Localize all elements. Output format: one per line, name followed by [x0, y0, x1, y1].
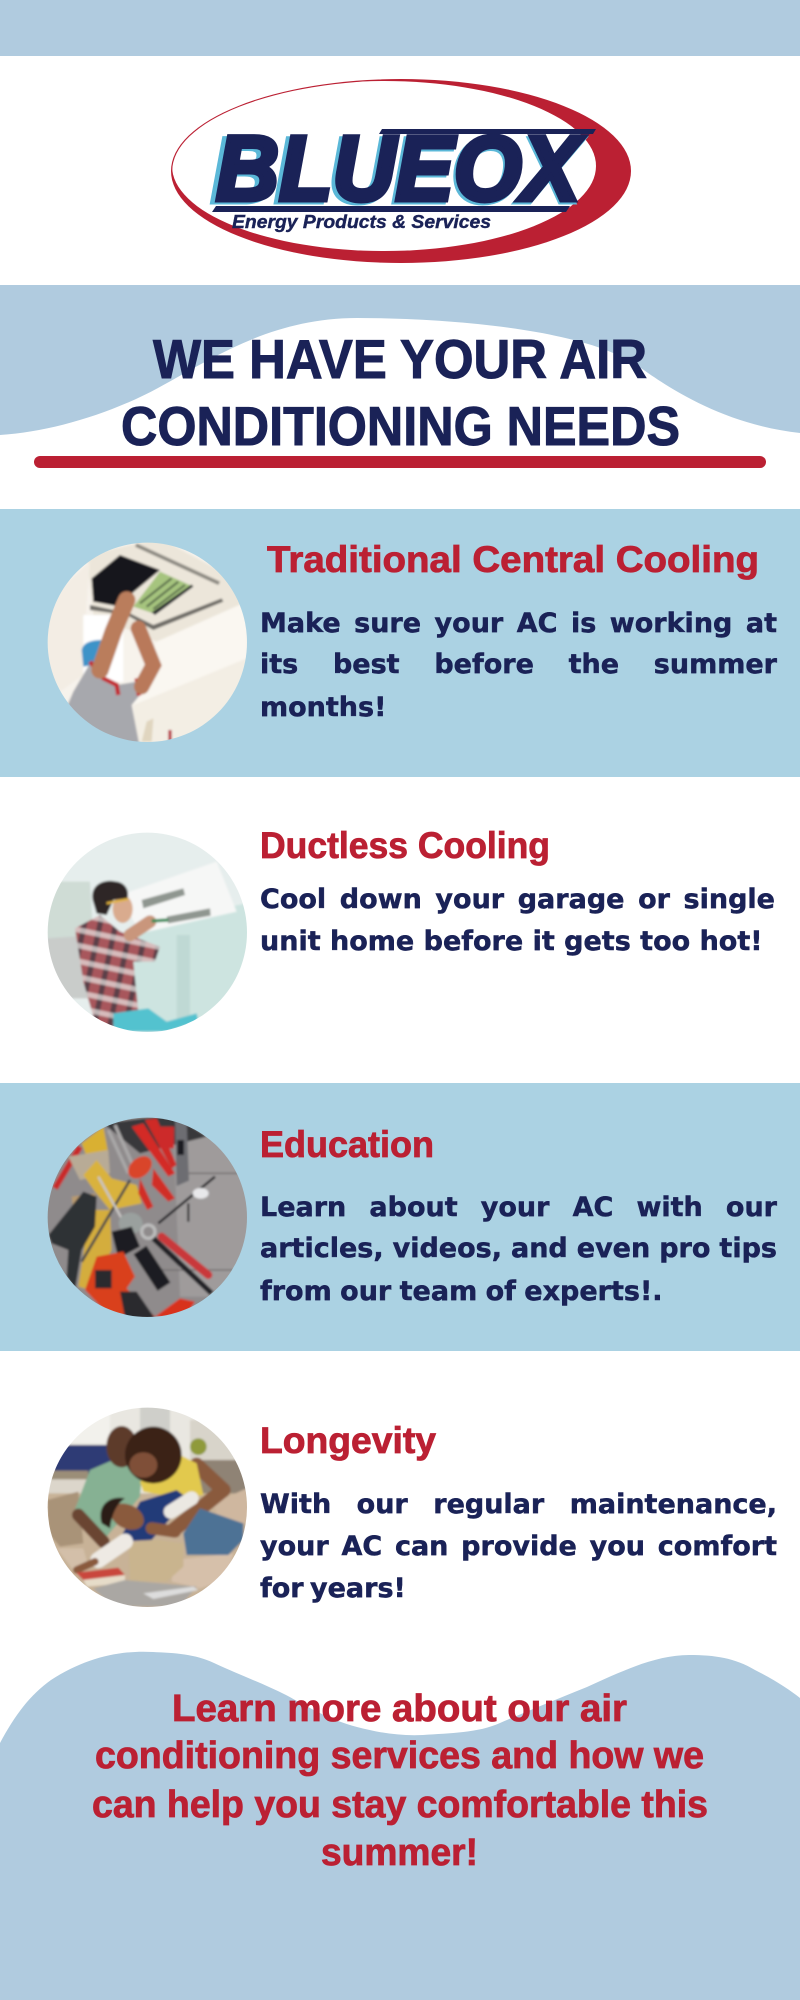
- call to action text: can help you stay comfortable this: [92, 1784, 708, 1826]
- section text: articles, videos, and even pro tips: [260, 1233, 777, 1264]
- section text: Learn about your AC with our: [260, 1192, 777, 1223]
- photo: technician repairing a wall unit: [48, 832, 247, 1032]
- red underline: [34, 456, 766, 468]
- photo: tools on a wooden floor: [48, 1118, 247, 1317]
- section heading: Education: [260, 1124, 434, 1165]
- photo: family on a sofa: [48, 1408, 247, 1607]
- call to action text: [92, 1688, 708, 1874]
- section text: Cool down your garage or single: [260, 884, 775, 915]
- call to action text: conditioning services and how we: [95, 1735, 704, 1777]
- section text: its best before the summer: [260, 649, 777, 680]
- heading panel with wave: [0, 285, 800, 468]
- panel: call to action: [0, 1652, 800, 2000]
- logo: Blueox Energy Products & Services: [171, 79, 631, 263]
- section text: [260, 884, 775, 957]
- section text: for years!: [260, 1573, 406, 1604]
- panel: traditional central cooling: [0, 509, 800, 777]
- title: CONDITIONING NEEDS: [121, 395, 680, 457]
- section text: With our regular maintenance,: [260, 1489, 777, 1520]
- panel: longevity: [48, 1408, 777, 1607]
- wave background: [0, 1652, 800, 2000]
- section text: your AC can provide you comfort: [260, 1531, 777, 1562]
- section text: Make sure your AC is working at: [260, 608, 777, 639]
- section heading: Traditional Central Cooling: [267, 539, 759, 580]
- section text: unit home before it gets too hot!: [260, 926, 763, 957]
- section heading: Ductless Cooling: [260, 825, 550, 866]
- call to action text: Learn more about our air: [172, 1688, 627, 1730]
- section text: [260, 1489, 777, 1604]
- logo tagline: Energy Products & Services: [232, 212, 491, 232]
- section heading: Longevity: [260, 1420, 436, 1461]
- call to action text: summer!: [321, 1832, 478, 1874]
- wave background: [0, 285, 800, 509]
- panel: ductless cooling: [48, 830, 774, 1032]
- logo oval swoosh: [171, 79, 631, 263]
- logo wordmark BLUEOX: BLUEOX: [216, 118, 584, 220]
- panel: education: [0, 1083, 800, 1351]
- section text: [260, 608, 778, 723]
- section text: [260, 1192, 778, 1307]
- section text: months!: [260, 692, 386, 723]
- title: [121, 328, 680, 457]
- photo: technician servicing a ceiling unit: [48, 542, 247, 742]
- title: WE HAVE YOUR AIR: [153, 328, 647, 390]
- top band: [0, 0, 800, 56]
- section text: from our team of experts!.: [260, 1276, 663, 1307]
- logo wordmark BLUEOX: BLUEOX: [211, 120, 583, 222]
